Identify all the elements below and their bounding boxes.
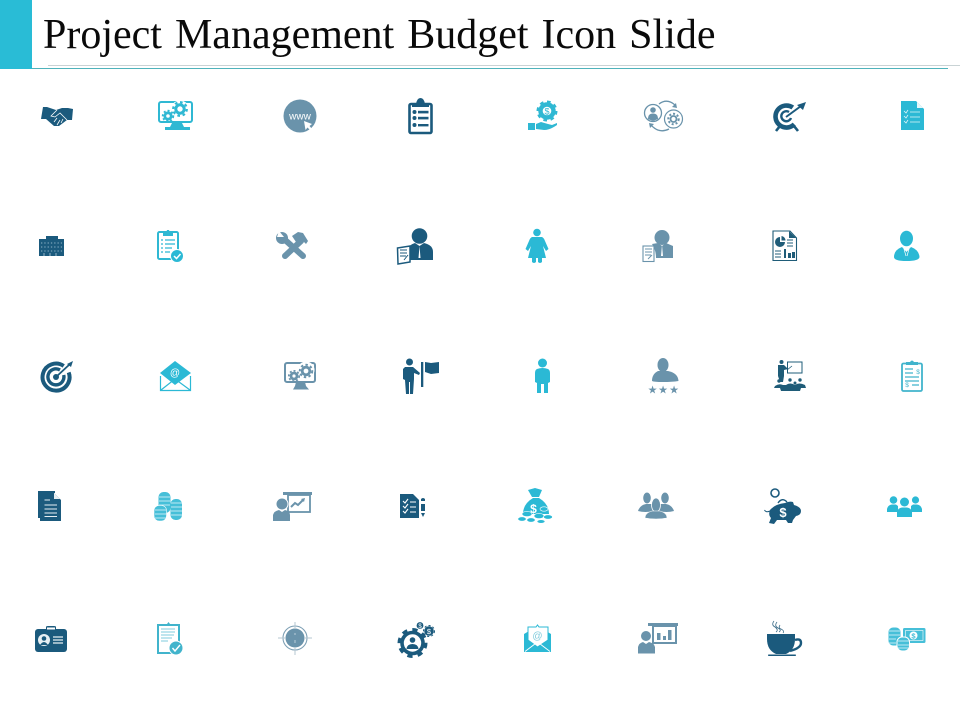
icon: gear with person and dollars: $ xyxy=(418,624,422,630)
icon: piggy bank with coin: $ xyxy=(779,505,787,520)
icon: open envelope with at sign xyxy=(160,361,191,390)
icon: man with three stars: ★ xyxy=(658,384,668,396)
icon: open envelope with at sign: @ xyxy=(170,368,180,379)
icon: gear with person and dollars xyxy=(399,622,434,656)
icon: man bust xyxy=(894,231,920,261)
icon: cash and coins xyxy=(888,627,926,651)
icon: clipboard with dollars: $ xyxy=(905,382,909,389)
icon: monitor with gears, grey xyxy=(285,362,315,390)
icon: man standing xyxy=(535,358,550,393)
icon: report with charts xyxy=(773,231,796,260)
icon: coin stacks xyxy=(154,492,182,521)
icon: businessman with document, grey xyxy=(643,230,673,262)
icon: presenter with audience xyxy=(774,360,806,391)
icon: www globe xyxy=(284,100,316,132)
icon: man with three stars: ★ xyxy=(648,384,658,396)
icon: presenter with bar chart xyxy=(638,623,678,654)
icon: clipboard with check xyxy=(158,230,184,262)
icon: clipboard with dollars: $ xyxy=(916,369,920,376)
icon: checklist and pen xyxy=(400,494,425,518)
icon: hand holding dollar gear: $ xyxy=(544,106,550,116)
icon: target with arrow xyxy=(776,102,806,131)
icon: handshake xyxy=(41,107,73,126)
icon: crossed wrench and hammer xyxy=(276,231,308,256)
icon: group of three cyan xyxy=(887,496,922,517)
icon: envelope with letter xyxy=(524,625,551,652)
icon: checklist document xyxy=(901,101,924,130)
icon: envelope with letter: @ xyxy=(532,631,543,642)
icon: ID badge xyxy=(35,626,67,652)
icon: person and gear cycle xyxy=(644,101,682,131)
icon: clipboard list xyxy=(410,98,432,133)
icon: man with flag xyxy=(403,358,439,394)
icon: clipboard with check xyxy=(158,622,183,655)
icon: woman xyxy=(526,229,548,263)
icon: hand holding dollar gear xyxy=(528,102,557,130)
title: Project Management Budget Icon Slide xyxy=(43,12,716,58)
icon: presenter with line chart xyxy=(273,492,312,521)
icon: steaming coffee cup xyxy=(767,621,801,656)
icon: money bag and coins xyxy=(518,488,552,523)
icon: stacked documents xyxy=(38,491,61,521)
icon: man with three stars xyxy=(648,358,679,396)
accent bar xyxy=(0,0,32,69)
icon: money bag and coins: $ xyxy=(530,502,537,516)
icon: bullseye with arrow xyxy=(43,361,73,391)
icon: man with three stars: ★ xyxy=(669,384,679,396)
icon: businessman with document xyxy=(398,228,433,264)
icon: clipboard with dollars xyxy=(902,360,922,391)
icon: gear with person and dollars: $ xyxy=(427,627,432,636)
icon: group of three grey xyxy=(638,492,674,519)
icon: monitor with gears xyxy=(159,100,192,130)
icon: cash and coins: $ xyxy=(911,632,916,640)
icon: office building xyxy=(39,236,64,256)
icon: www globe: www xyxy=(288,112,312,122)
icon: crosshair xyxy=(278,622,312,655)
icon: piggy bank with coin xyxy=(764,489,801,524)
